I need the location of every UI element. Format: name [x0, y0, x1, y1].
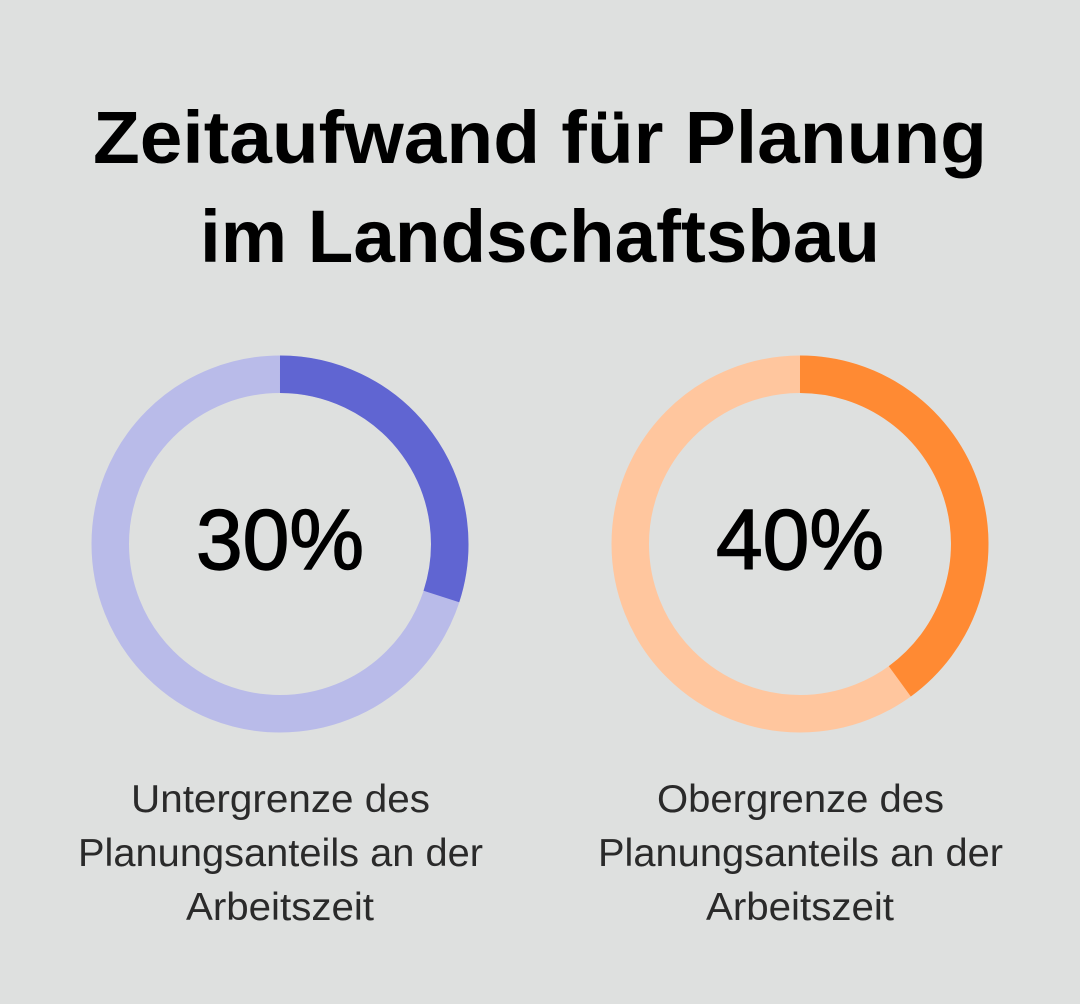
caption: upper limit — [598, 778, 1003, 929]
title: Zeitaufwand für Planung — [93, 96, 987, 179]
panel: lower limit 30% — [78, 374, 483, 929]
caption: lower limit: Untergrenze des — [131, 778, 430, 821]
caption: lower limit: Planungsanteils an der — [78, 832, 483, 875]
donut chart: 40% — [630, 374, 970, 714]
panel: upper limit 40% — [598, 374, 1003, 929]
title: im Landschaftsbau — [200, 195, 880, 278]
caption: upper limit: Planungsanteils an der — [598, 832, 1003, 875]
caption: lower limit — [78, 778, 483, 929]
value: 40%: 40% — [716, 493, 884, 588]
caption: lower limit: Arbeitszeit — [186, 886, 374, 929]
caption: upper limit: Obergrenze des — [657, 778, 944, 821]
value: 30%: 30% — [196, 493, 364, 588]
caption: upper limit: Arbeitszeit — [706, 886, 894, 929]
title — [93, 96, 987, 278]
donut chart: 30% — [110, 374, 450, 714]
